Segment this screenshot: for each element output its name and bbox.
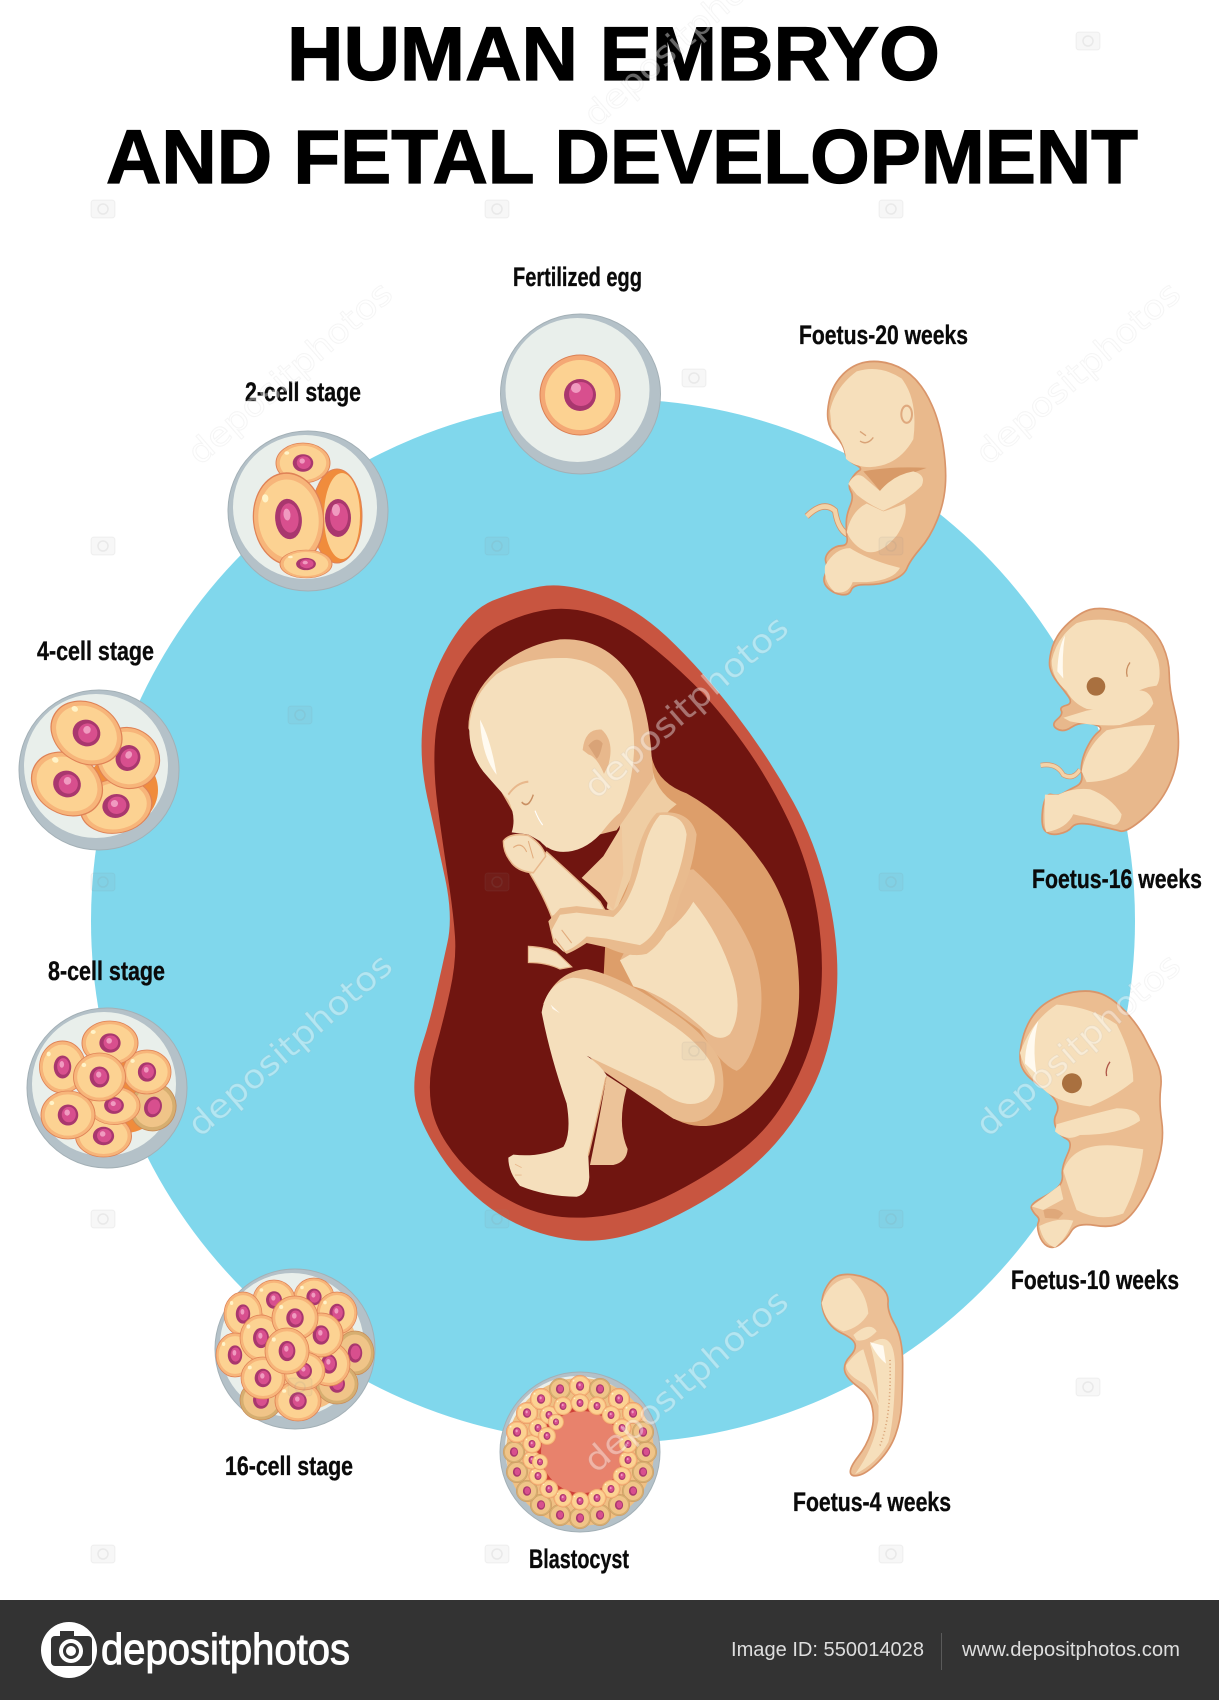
blue background circle bbox=[91, 399, 1135, 1443]
16-cell stage bbox=[215, 1269, 375, 1429]
label: 4-cell stage: 4-cell stage bbox=[37, 636, 154, 666]
forearm and hand at mouth bbox=[530, 852, 607, 917]
label: 2-cell stage: 2-cell stage bbox=[245, 377, 361, 407]
central fetus in uterus bbox=[414, 585, 837, 1241]
title bbox=[106, 12, 1138, 200]
upper arm and hand bbox=[548, 812, 697, 955]
label: 8-cell stage: 8-cell stage bbox=[48, 956, 165, 986]
label: fertilized egg: Fertilized egg bbox=[513, 262, 642, 292]
fetus head bbox=[468, 639, 653, 852]
uterus wall bbox=[414, 585, 837, 1241]
label: foetus 20 weeks: Foetus-20 weeks bbox=[799, 320, 968, 350]
blastocyst bbox=[500, 1372, 660, 1532]
4-cell stage bbox=[19, 689, 179, 850]
watermarks: depositphotos bbox=[180, 945, 400, 1144]
footer logo icon bbox=[41, 1622, 97, 1678]
fetus body bbox=[600, 756, 799, 1126]
uterus cavity bbox=[430, 609, 822, 1218]
watermarks: depositphotos bbox=[576, 1281, 796, 1480]
watermarks: depositphotos bbox=[576, 607, 796, 806]
image id: Image ID: 550014028 bbox=[731, 1639, 924, 1661]
title: HUMAN EMBRYO bbox=[287, 12, 940, 97]
label: foetus 4 weeks: Foetus-4 weeks bbox=[793, 1487, 951, 1517]
far leg bbox=[590, 1075, 628, 1165]
watermarks: depositphotos bbox=[180, 273, 400, 472]
footer bar bbox=[0, 1600, 1219, 1700]
8-cell stage bbox=[27, 1008, 187, 1168]
fetus: 16 weeks bbox=[1041, 609, 1178, 834]
2-cell stage bbox=[228, 431, 388, 591]
label: blastocyst: Blastocyst bbox=[529, 1544, 629, 1574]
fetus: 10 weeks bbox=[1020, 991, 1163, 1247]
near leg and foot bbox=[508, 969, 723, 1197]
umbilical cord bbox=[528, 946, 572, 969]
watermarks: depositphotos bbox=[968, 273, 1188, 472]
title: AND FETAL DEVELOPMENT bbox=[106, 115, 1138, 200]
fetus: 20 weeks bbox=[807, 361, 946, 595]
fetus neck bbox=[607, 761, 677, 913]
fertilized egg bbox=[500, 314, 660, 474]
website: www.depositphotos.com bbox=[961, 1639, 1180, 1661]
label: 16-cell stage: 16-cell stage bbox=[225, 1451, 353, 1481]
footer logo text: depositphotos bbox=[101, 1625, 350, 1674]
watermarks: depositphotos bbox=[968, 945, 1188, 1144]
fetus: 4 weeks bbox=[822, 1274, 903, 1476]
